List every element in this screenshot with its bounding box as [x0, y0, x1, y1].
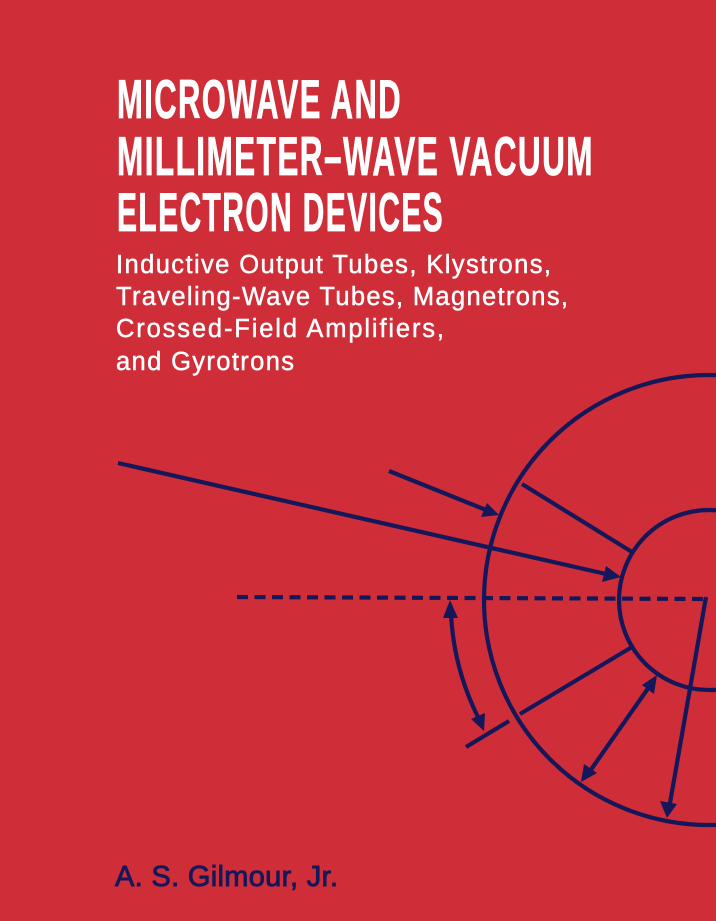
long arrow to inner circle — [118, 463, 621, 582]
upper radial line — [522, 484, 632, 552]
short arrow to outer circle — [389, 471, 499, 517]
subtitle: Traveling-Wave Tubes, Magnetrons, — [116, 283, 568, 311]
title — [117, 68, 594, 243]
lower radial line — [520, 647, 632, 714]
author: A. S. Gilmour, Jr. — [115, 861, 339, 893]
subtitle: and Gyrotrons — [116, 348, 294, 376]
dashed axis — [237, 597, 707, 599]
title: MICROWAVE AND — [117, 68, 402, 130]
subtitle: Inductive Output Tubes, Klystrons, — [116, 251, 551, 279]
double arrow between circles — [581, 675, 657, 782]
radial line extension — [466, 721, 509, 747]
subtitle: Crossed-Field Amplifiers, — [116, 315, 444, 343]
curved double arrow — [443, 600, 485, 731]
vertical arrow — [660, 597, 706, 818]
title: ELECTRON DEVICES — [117, 181, 444, 243]
inner circle — [619, 510, 716, 690]
outer circle — [484, 375, 716, 825]
diagram: magnetron geometry — [118, 375, 716, 825]
subtitle — [116, 251, 568, 376]
